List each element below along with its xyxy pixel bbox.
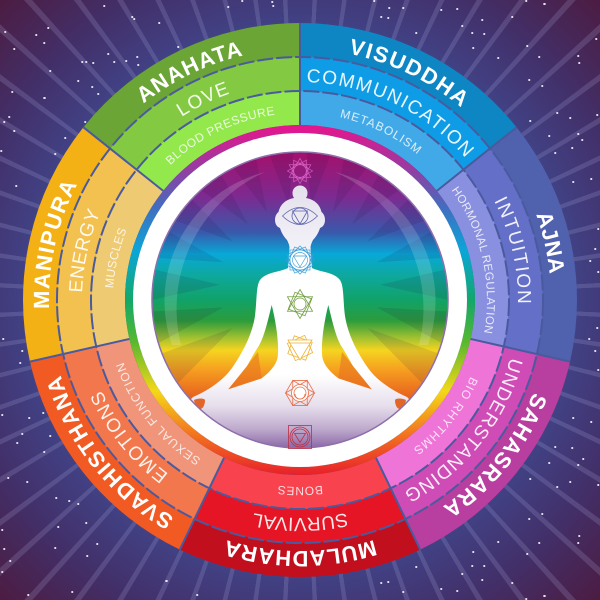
band: Muladhara quality — [195, 488, 405, 543]
gap facets — [228, 352, 372, 389]
icon: Visuddha chakra — [286, 246, 314, 274]
band: Manipura quality — [57, 148, 137, 354]
panel: Sahasrara — [376, 339, 570, 550]
icon: Svadhisthana chakra — [286, 380, 314, 406]
band: Ajna quality — [463, 148, 543, 354]
inner disc edge — [152, 152, 448, 448]
hands — [194, 398, 406, 409]
ring dividers — [30, 23, 570, 550]
band: Svadhisthana quality — [63, 346, 209, 519]
band: Anahata body function — [137, 91, 300, 191]
band: Svadhisthana body function — [96, 339, 224, 488]
label: MANIPURA: MANIPURA — [34, 183, 77, 308]
label: LOVE: LOVE — [176, 82, 229, 116]
band: Sahasrara body function — [376, 339, 504, 488]
label: ANAHATA: ANAHATA — [139, 42, 242, 104]
band: Visuddha body function — [300, 91, 463, 191]
label: SEXUAL FUNCTION: SEXUAL FUNCTION — [116, 362, 200, 464]
band: Manipura body function — [91, 170, 163, 346]
icon: Anahata chakra — [287, 290, 313, 318]
band: Anahata quality — [110, 57, 300, 170]
band: Muladhara name — [180, 519, 420, 577]
label: SURVIVAL: SURVIVAL — [254, 513, 347, 532]
panel: Svadhisthana — [30, 339, 224, 550]
label: ENERGY: ENERGY — [69, 208, 98, 292]
icon: Manipura chakra — [287, 335, 313, 361]
sun rays — [152, 153, 447, 382]
label: SAHASRARA: SAHASRARA — [443, 394, 546, 516]
panel: Visuddha — [301, 23, 516, 191]
label: BLOOD PRESSURE: BLOOD PRESSURE — [166, 106, 274, 165]
band: Sahasrara quality — [391, 346, 537, 519]
panel: Anahata — [84, 23, 299, 191]
band: Svadhisthana name — [30, 354, 195, 550]
body silhouette — [191, 186, 409, 448]
label: MULADHARA: MULADHARA — [227, 540, 377, 566]
icon: Muladhara chakra — [288, 426, 312, 448]
label: SVADHISTHANA: SVADHISTHANA — [48, 376, 172, 528]
label: METABOLISM: METABOLISM — [340, 109, 422, 154]
band: Ajna body function — [437, 170, 509, 346]
rainbow gradient — [152, 152, 448, 448]
label: MUSCLES: MUSCLES — [105, 228, 126, 288]
band: Visuddha quality — [300, 57, 490, 170]
central rainbow disc — [152, 152, 448, 448]
rainbow ring — [129, 129, 471, 471]
faint halo arcs — [164, 172, 436, 345]
label: VISUDDHA: VISUDDHA — [352, 38, 466, 108]
band: Muladhara body function — [209, 458, 391, 509]
band: Manipura name — [23, 127, 110, 362]
band: Ajna name — [490, 127, 577, 362]
panel: Ajna — [437, 128, 577, 361]
band: Anahata name — [83, 23, 300, 148]
label: BIO RHYTHMS: BIO RHYTHMS — [414, 377, 478, 454]
label: HORMONAL REGULATION: HORMONAL REGULATION — [452, 186, 495, 334]
band: Sahasrara name — [405, 354, 570, 550]
label: AJNA: AJNA — [536, 214, 564, 274]
icon: Sahasrara chakra — [287, 155, 316, 184]
icon: Ajna chakra — [282, 208, 318, 224]
label: BONES: BONES — [278, 486, 322, 496]
panel: Manipura — [23, 127, 163, 362]
label: INTUITION: INTUITION — [494, 196, 532, 302]
panel: Muladhara — [180, 458, 420, 577]
white ring — [133, 133, 467, 467]
label: EMOTIONS: EMOTIONS — [91, 392, 168, 484]
label: UNDERSTANDING: UNDERSTANDING — [406, 360, 522, 501]
label: COMMUNICATION: COMMUNICATION — [308, 69, 474, 157]
band: Visuddha name — [300, 23, 517, 148]
